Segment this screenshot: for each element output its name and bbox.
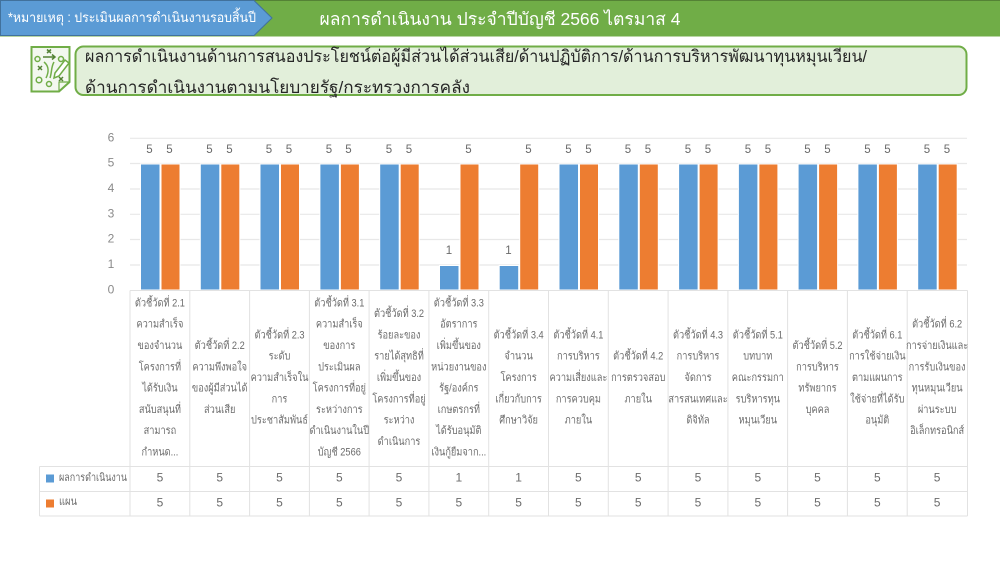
row values: plan: 5 — [396, 496, 403, 510]
bars group 4.1: 5 — [585, 144, 592, 156]
category label 3.2: เพิ่มขึ้นของ — [377, 369, 421, 384]
note arrow banner: *หมายเหตุ : ประเมินผลการดำเนินงานรอบสิ้นปี — [8, 7, 256, 26]
row values: plan: 5 — [575, 496, 582, 510]
category label 5.2: บุคคล — [806, 404, 829, 416]
row values: actual result: 5 — [276, 470, 283, 484]
category label 4.1: การควบคุม — [556, 394, 601, 406]
bars group 3.1: 5 — [345, 144, 352, 156]
bars group 2.1 — [140, 144, 180, 290]
category label 3.1: โครงการที่อยู่ — [313, 380, 366, 395]
category label 5.1: ตัวชี้วัดที่ 5.1 — [733, 326, 783, 342]
bars group 2.1: 5 — [146, 144, 153, 156]
category label 2.3: ประชาสัมพันธ์ — [251, 414, 308, 427]
bars group 4.2 — [619, 144, 658, 290]
category label 3.3: อัตราการ — [440, 319, 478, 331]
category label 5.2: ทรัพยากร — [798, 383, 837, 395]
note arrow banner — [0, 0, 272, 36]
y axis labels: 6 — [108, 130, 115, 144]
row values: plan: 5 — [635, 496, 642, 510]
category label 4.3: ดิจิทัล — [686, 414, 710, 427]
category label 3.4: ศึกษาวิจัย — [499, 414, 538, 427]
category label 3.4: โครงการ — [500, 370, 537, 384]
category label 3.2: รายได้สุทธิที่ — [374, 348, 424, 363]
category label 6.1: ใช้จ่ายที่ได้รับ — [850, 390, 904, 406]
category label 3.2: ดำเนินการ — [378, 435, 421, 448]
category label 5.1: หมุนเวียน — [739, 414, 777, 427]
category label 4.1: ความเสี่ยงและ — [549, 369, 607, 384]
y axis labels: 1 — [108, 257, 115, 271]
icon: strategy plan on paper with pencil — [32, 47, 70, 92]
category label 6.1: ตัวชี้วัดที่ 6.1 — [852, 326, 903, 342]
bars group 5.2 — [798, 144, 838, 290]
bars group 3.2: 5 — [386, 144, 392, 156]
y axis labels: 0 — [108, 282, 115, 296]
category label 2.2: ความพึงพอใจ — [192, 361, 247, 374]
bars group 5.1: 5 — [745, 144, 751, 156]
row values: plan: 5 — [157, 496, 164, 510]
header band — [0, 0, 1000, 36]
category label 2.1: โครงการที่ — [139, 358, 181, 374]
category label 2.2: ตัวชี้วัดที่ 2.2 — [195, 337, 245, 352]
category label 4.3: จัดการ — [684, 372, 712, 384]
bars group 4.3: 5 — [685, 144, 691, 156]
bars group 3.4: 1 — [505, 245, 512, 257]
category label 5.2: ตัวชี้วัดที่ 5.2 — [792, 337, 843, 352]
category label 3.1: ประเมินผล — [318, 361, 360, 374]
category label 2.3: ความสำเร็จใน — [251, 369, 308, 384]
category label 3.3: เกษตรกรที่ — [438, 401, 480, 416]
row values: plan: 5 — [336, 496, 343, 510]
bars group 4.1 — [559, 144, 598, 290]
bars group 3.1: 5 — [326, 144, 332, 156]
bars group 4.3 — [679, 144, 718, 290]
bars group 4.1: 5 — [565, 144, 572, 156]
row values: plan: 5 — [814, 496, 821, 510]
bars group 3.1 — [320, 144, 359, 290]
category label 5.2: การบริหาร — [796, 361, 839, 374]
bars group 5.1: 5 — [765, 144, 771, 156]
category label 3.1: ตัวชี้วัดที่ 3.1 — [314, 295, 365, 310]
legend: actual result: ผลการดำเนินงาน — [59, 472, 127, 484]
bars group 5.1 — [738, 144, 778, 290]
row values: plan: 5 — [276, 496, 283, 510]
row values: actual result: 1 — [455, 470, 462, 484]
bars group 6.1: 5 — [884, 144, 891, 156]
row values: plan: 5 — [216, 496, 223, 510]
category label 2.1: สามารถ — [144, 426, 176, 437]
bars group 2.3: 5 — [286, 144, 292, 156]
category label 4.1: การบริหาร — [557, 350, 600, 363]
subtitle line 1: ผลการดำเนินงานด้านการสนองประโยชน์ต่อผู้มีส่วนได้ส่วนเสีย/ด้านปฏิบัติการ/ด้านการบริหารพัฒนาทุนหมุนเวียน/ — [85, 46, 867, 67]
category label 4.3: สารสนเทศและ — [668, 394, 728, 406]
row values: actual result: 5 — [695, 470, 702, 484]
category label 2.3: ระดับ — [269, 351, 290, 363]
bars group 2.3 — [260, 144, 300, 290]
subtitle box — [76, 46, 966, 98]
category label 2.1: ความสำเร็จ — [136, 316, 183, 331]
category label 3.1: ดำเนินงานในปี — [310, 425, 369, 437]
legend: plan: แผน — [59, 496, 77, 508]
row values: plan: 5 — [515, 496, 522, 510]
row values: actual result: 5 — [575, 470, 582, 484]
category label 3.3: หน่วยงานของ — [431, 362, 486, 374]
y axis labels — [108, 130, 115, 296]
row values: actual result: 5 — [216, 470, 223, 484]
category label 2.1: ได้รับเงิน — [141, 382, 178, 395]
bars group 2.2: 5 — [226, 144, 233, 156]
category label 4.2: ตัวชี้วัดที่ 4.2 — [613, 348, 664, 363]
category label 3.1: ระหว่างการ — [316, 404, 363, 416]
category label 3.3: ตัวชี้วัดที่ 3.3 — [434, 295, 484, 310]
subtitle line 2: ด้านการดำเนินงานตามนโยบายรัฐ/กระทรวงการคลัง — [85, 77, 470, 98]
category label 3.2: โครงการที่อยู่ — [372, 390, 426, 406]
bars group 2.3: 5 — [266, 144, 272, 156]
bars group 4.3: 5 — [705, 144, 711, 156]
data table — [40, 290, 968, 516]
y axis labels: 4 — [108, 181, 115, 195]
bars group 6.2 — [918, 144, 957, 290]
category label 3.3: ได้รับอนุมัติ — [435, 425, 481, 437]
category label 3.1: ความสำเร็จ — [316, 316, 363, 331]
bars group 2.2: 5 — [206, 144, 213, 156]
category label 4.3: ตัวชี้วัดที่ 4.3 — [673, 326, 723, 342]
row values: plan: 5 — [455, 496, 462, 510]
row values: plan: 5 — [934, 496, 941, 510]
category label 6.2: อิเล็กทรอนิกส์ — [910, 422, 964, 437]
category label 6.2: ผ่านระบบ — [918, 404, 956, 416]
category label 3.2: ร้อยละของ — [378, 329, 420, 342]
category label 6.1: การใช้จ่ายเงิน — [849, 350, 906, 363]
category label 4.2: ภายใน — [624, 393, 652, 406]
category label 3.3: เงินกู้ยืมจาก... — [431, 445, 486, 459]
category label 3.3: เพิ่มขึ้นของ — [437, 337, 481, 352]
bars group 6.2: 5 — [944, 144, 950, 156]
bars group 5.2: 5 — [804, 144, 811, 156]
category label 4.3: การบริหาร — [677, 350, 720, 363]
category label 5.1: คณะกรรมกา — [732, 372, 784, 384]
category label 6.2: การจ่ายเงินและ — [906, 339, 968, 352]
category label 4.1: ตัวชี้วัดที่ 4.1 — [553, 326, 604, 342]
category label 3.4: จำนวน — [504, 351, 533, 363]
category label 3.4: เกี่ยวกับการ — [495, 390, 542, 406]
category label 4.2: การตรวจสอบ — [611, 372, 665, 384]
category label 3.2: ระหว่าง — [384, 415, 414, 427]
category label 6.1: ตามแผนการ — [852, 372, 903, 384]
row values: actual result: 5 — [814, 470, 821, 484]
category label 6.2: ตัวชี้วัดที่ 6.2 — [912, 316, 962, 331]
category label 3.3: รัฐ/องค์กร — [439, 382, 479, 395]
bars group 6.1: 5 — [864, 144, 871, 156]
bars group 3.3 — [440, 144, 479, 290]
category label 2.2: ส่วนเสีย — [204, 403, 235, 416]
row values: actual result: 5 — [934, 470, 941, 484]
category label 3.1: บัญชี 2566 — [318, 446, 361, 459]
bars group 4.2: 5 — [625, 144, 631, 156]
bar chart — [108, 130, 967, 296]
bars group 4.2: 5 — [645, 144, 651, 156]
category label 2.1: ตัวชี้วัดที่ 2.1 — [135, 295, 185, 310]
bars group 3.2 — [380, 144, 419, 290]
row values: plan — [157, 496, 941, 510]
category label 5.1: บทบาท — [743, 351, 773, 363]
bars group 6.1 — [858, 144, 897, 290]
row values: plan: 5 — [695, 496, 702, 510]
category label 2.1: ของจำนวน — [138, 340, 182, 352]
category label 6.2: ทุนหมุนเวียน — [912, 382, 963, 395]
row values: plan: 5 — [874, 496, 881, 510]
bars group 5.2: 5 — [824, 144, 831, 156]
bars group 3.3: 5 — [465, 144, 472, 156]
row values: actual result: 1 — [515, 470, 522, 484]
row values: actual result: 5 — [635, 470, 642, 484]
category label 2.3: ตัวชี้วัดที่ 2.3 — [254, 326, 305, 342]
header title: ผลการดำเนินงาน ประจำปีบัญชี 2566 ไตรมาส 4 — [320, 9, 681, 29]
category label 6.2: การรับเงินของ — [909, 361, 966, 374]
category label 3.1: ของการ — [323, 340, 356, 352]
bars group 3.2: 5 — [406, 144, 412, 156]
legend: plan — [46, 496, 77, 508]
bars group 3.4 — [499, 144, 539, 290]
category label 2.1: กำหนด... — [141, 447, 178, 459]
row values: actual result: 5 — [157, 470, 164, 484]
bars group 3.3: 1 — [446, 245, 452, 257]
category label 3.2: ตัวชี้วัดที่ 3.2 — [374, 305, 424, 320]
category label 4.1: ภายใน — [565, 414, 592, 427]
category label 2.3: การ — [272, 394, 288, 406]
row values: actual result: 5 — [336, 470, 343, 484]
row values: actual result: 5 — [874, 470, 881, 484]
category label 5.1: รบริหารทุน — [736, 393, 780, 406]
category label 2.2: ของผู้มีส่วนได้ — [192, 382, 247, 395]
y axis labels: 5 — [108, 156, 115, 170]
row values: actual result — [157, 470, 941, 484]
y axis labels: 2 — [108, 232, 115, 246]
bars group 2.2 — [200, 144, 240, 290]
bars group 6.2: 5 — [924, 144, 930, 156]
category label 6.1: อนุมัติ — [865, 414, 889, 427]
bars group 2.1: 5 — [166, 144, 173, 156]
category label 3.4: ตัวชี้วัดที่ 3.4 — [494, 326, 544, 342]
row values: actual result: 5 — [396, 470, 403, 484]
category label 2.1: สนับสนุนที่ — [139, 401, 181, 416]
row values: plan: 5 — [754, 496, 761, 510]
bars group 3.4: 5 — [525, 144, 532, 156]
y axis labels: 3 — [108, 206, 115, 220]
row values: actual result: 5 — [754, 470, 761, 484]
